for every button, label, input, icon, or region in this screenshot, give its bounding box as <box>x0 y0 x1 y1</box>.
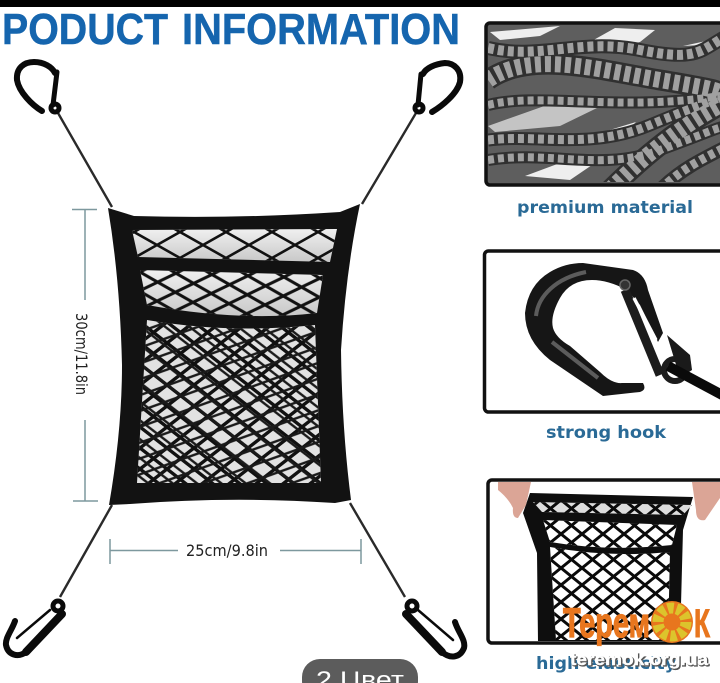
panel: high elasticity <box>488 480 720 643</box>
stretched net <box>523 493 693 642</box>
title: PODUCT <box>2 5 168 54</box>
dimension: width <box>110 539 361 564</box>
mesh: top pocket <box>132 229 337 262</box>
rope texture <box>488 26 720 190</box>
panel: strong hook <box>484 251 720 412</box>
label: premium material: premium material <box>517 198 693 218</box>
hook: top left <box>17 62 59 112</box>
hands <box>498 482 531 518</box>
title <box>2 5 460 54</box>
color selector pill <box>302 659 418 683</box>
watermark: Teremok: teremok.org.ua <box>570 650 709 669</box>
dimension: height <box>72 210 98 501</box>
mesh: middle pocket <box>140 270 323 316</box>
large hook <box>525 263 720 396</box>
label: high elasticity: high elasticity <box>536 654 676 674</box>
elastic cords <box>58 113 416 597</box>
panel: premium material <box>486 23 720 190</box>
watermark: Teremok: Терем <box>563 599 650 646</box>
hook: top right <box>415 63 460 112</box>
sun emblem <box>651 601 693 643</box>
watermark: Teremok: К <box>694 602 710 646</box>
hook: bottom left <box>6 601 63 655</box>
watermark: Teremok: teremok.org.ua <box>571 651 710 670</box>
top black bar <box>0 0 720 7</box>
net frame <box>108 204 360 505</box>
hook: bottom right <box>406 601 464 657</box>
cargo net <box>108 204 360 505</box>
mesh: lower pocket <box>137 320 321 483</box>
dimension: height: 30cm/11.8in <box>72 313 91 395</box>
dimension: width: 25cm/9.8in <box>186 541 268 560</box>
title: INFORMATION <box>182 5 460 54</box>
watermark: Teremok <box>563 599 710 670</box>
label: strong hook: strong hook <box>546 423 667 443</box>
